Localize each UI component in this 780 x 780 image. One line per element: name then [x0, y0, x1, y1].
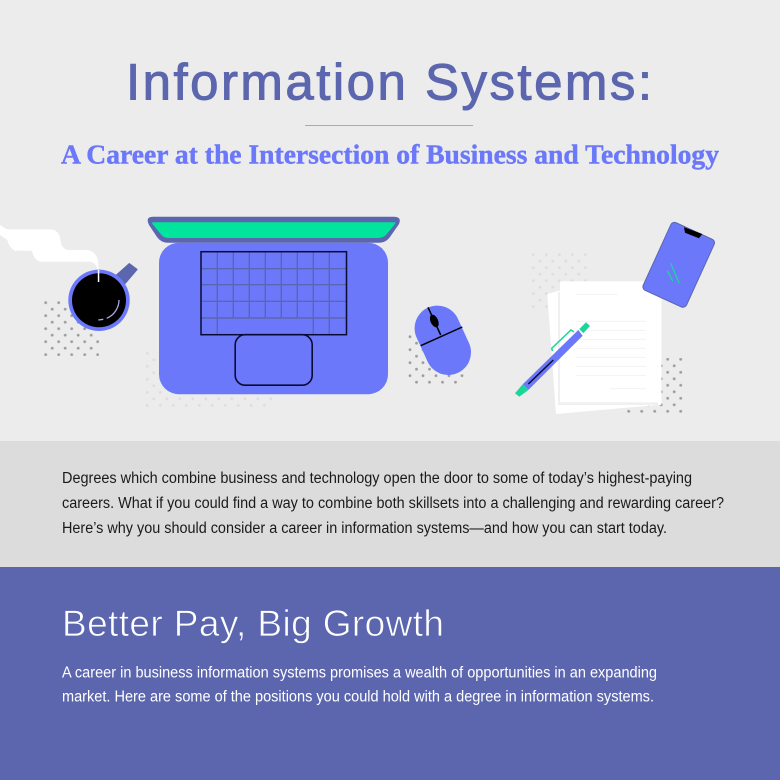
- section text block: market. Here are some of the positions you could hold with a degree in information systems.: [62, 689, 654, 706]
- subtitle: A Career at the Intersection of Business and Technology: [61, 138, 719, 169]
- decorative dots behind laptop: [145, 351, 275, 408]
- icon: pen: [515, 322, 590, 397]
- title divider: [305, 125, 473, 126]
- intro text block: Here’s why you should consider a career in information systems—and how you can start today.: [62, 520, 667, 537]
- title: Information Systems:: [126, 54, 652, 110]
- laptop base: [159, 243, 388, 394]
- intro text block: careers. What if you could find a way to combine both skillsets into a challenging and rewarding career?: [62, 495, 724, 512]
- header background panel: [0, 0, 780, 441]
- icon: computer mouse: [421, 307, 462, 352]
- decorative dots behind mouse: [408, 335, 464, 384]
- icon: paper documents: [547, 281, 661, 414]
- panel: better pay, big growth: [0, 567, 780, 780]
- icon: smartphone: [642, 221, 716, 309]
- keyboard: [201, 252, 346, 335]
- section text block: A career in business information systems promises a wealth of opportunities in an expanding: [62, 664, 657, 681]
- decorative dots above documents: [531, 253, 589, 309]
- laptop screen: [148, 217, 400, 243]
- touchpad: [235, 335, 312, 385]
- illustration: desk with laptop, coffee, mouse, documents and phone: [0, 217, 716, 414]
- section text block: [62, 664, 657, 706]
- panel: introduction: [0, 441, 780, 567]
- section heading: Better Pay, Big Growth: [62, 603, 444, 644]
- intro text block: Degrees which combine business and technology open the door to some of today’s highest-paying: [62, 470, 692, 487]
- intro text block: [62, 470, 724, 537]
- icon: laptop: [148, 217, 400, 394]
- decorative dots below documents: [626, 358, 684, 413]
- icon: coffee cup with steam: [0, 225, 137, 356]
